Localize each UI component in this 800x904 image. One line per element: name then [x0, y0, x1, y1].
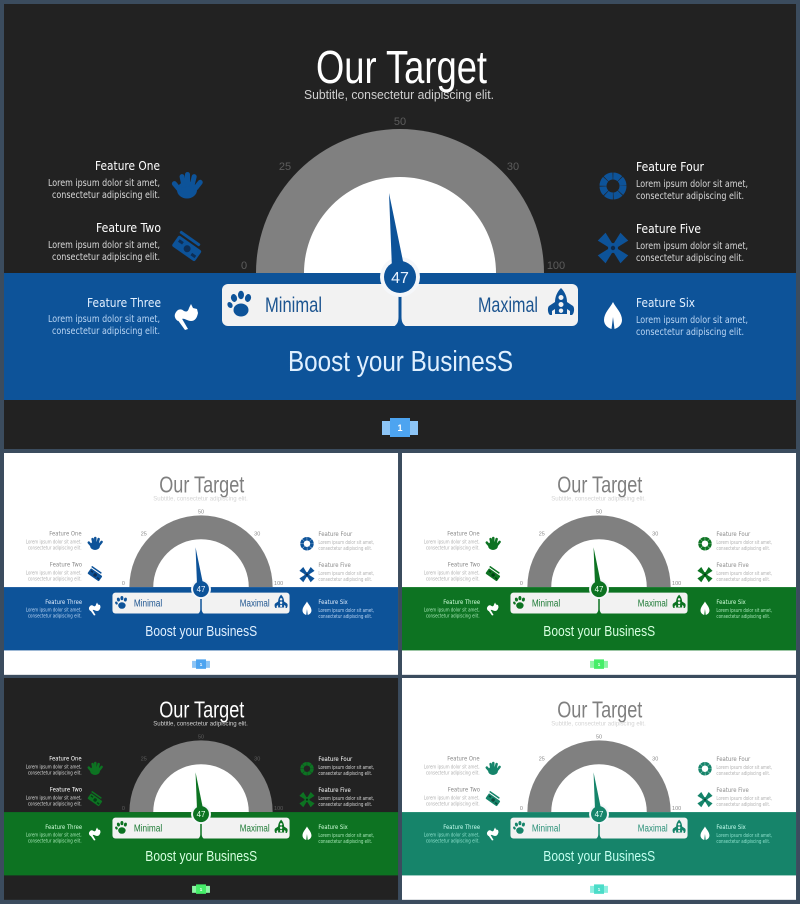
feature two: [48, 221, 161, 263]
feature three: Feature Three: [443, 599, 480, 606]
feature six: consectetur adipiscing elit.: [716, 614, 770, 620]
feature five: consectetur adipiscing elit.: [318, 802, 372, 808]
needle and value dial: [191, 772, 211, 824]
feature four: consectetur adipiscing elit.: [716, 546, 770, 552]
band: [4, 273, 796, 400]
icon: ring: [302, 539, 312, 549]
feature three: consectetur adipiscing elit.: [28, 614, 82, 620]
feature four: consectetur adipiscing elit.: [318, 546, 372, 552]
feature three: Feature Three: [443, 824, 480, 831]
subtitle: Subtitle, consectetur adipiscing elit.: [551, 495, 646, 502]
feature five: Lorem ipsum dolor sit amet,: [636, 241, 748, 252]
feature six: [716, 824, 772, 845]
feature four: Feature Four: [636, 160, 704, 174]
feature one: consectetur adipiscing elit.: [426, 546, 480, 552]
gauge: 30: [254, 757, 260, 763]
feature two: consectetur adipiscing elit.: [28, 577, 82, 583]
icon: windmill: [694, 563, 716, 586]
feature one: Lorem ipsum dolor sit amet,: [424, 765, 480, 771]
feature three: Lorem ipsum dolor sit amet,: [424, 833, 480, 839]
feature three: Feature Three: [45, 824, 82, 831]
feature one: Feature One: [447, 531, 480, 538]
needle and value dial: 47: [197, 585, 206, 594]
feature six: Lorem ipsum dolor sit amet,: [636, 315, 748, 326]
feature four: Lorem ipsum dolor sit amet,: [318, 765, 374, 771]
gauge: [241, 116, 565, 273]
minimal maximal box: [510, 593, 688, 614]
feature six: Lorem ipsum dolor sit amet,: [716, 608, 772, 614]
subtitle: Subtitle, consectetur adipiscing elit.: [153, 720, 248, 727]
feature five: Feature Five: [636, 222, 701, 236]
feature three: [26, 599, 82, 620]
minimal maximal box: Minimal: [134, 599, 162, 610]
feature four: Lorem ipsum dolor sit amet,: [318, 540, 374, 546]
icon: ring: [700, 764, 710, 774]
feature six: [716, 599, 772, 620]
feature four: Lorem ipsum dolor sit amet,: [716, 765, 772, 771]
feature six: consectetur adipiscing elit.: [636, 327, 744, 338]
subtitle: Subtitle, consectetur adipiscing elit.: [304, 87, 494, 102]
feature three: Lorem ipsum dolor sit amet,: [26, 833, 82, 839]
icon: flag: [89, 603, 101, 616]
panel: small light blue slide: [4, 453, 398, 675]
needle and value dial: [589, 547, 609, 599]
pager: 1: [598, 887, 601, 892]
feature one: consectetur adipiscing elit.: [52, 190, 160, 201]
title: Our Target: [159, 471, 245, 497]
pager: 1: [200, 887, 203, 892]
feature six: Lorem ipsum dolor sit amet,: [318, 608, 374, 614]
gauge: 30: [652, 757, 658, 763]
feature two: Feature Two: [448, 562, 480, 569]
panel: small dark green slide: [4, 678, 398, 900]
gauge: 50: [198, 509, 204, 515]
feature one: Feature One: [95, 159, 160, 173]
needle and value dial: 47: [197, 810, 206, 819]
title: Our Target: [316, 41, 487, 93]
gauge: 30: [652, 532, 658, 538]
feature two: Lorem ipsum dolor sit amet,: [48, 240, 160, 251]
panel: small light teal slide: [402, 678, 796, 900]
gauge: 100: [274, 806, 283, 812]
icon: hand: [171, 172, 204, 198]
pager: [590, 884, 608, 894]
icon: flag: [487, 828, 499, 841]
gauge: 25: [279, 161, 291, 173]
feature five: [716, 562, 772, 583]
feature six: Feature Six: [318, 824, 348, 831]
feature four: Lorem ipsum dolor sit amet,: [636, 179, 748, 190]
feature one: Feature One: [49, 756, 82, 763]
feature two: Lorem ipsum dolor sit amet,: [424, 796, 480, 802]
icon: hand: [485, 537, 501, 550]
feature five: Lorem ipsum dolor sit amet,: [716, 571, 772, 577]
feature two: consectetur adipiscing elit.: [52, 252, 160, 263]
feature six: Feature Six: [636, 296, 695, 310]
icon: ring: [302, 764, 312, 774]
feature six: consectetur adipiscing elit.: [716, 839, 770, 845]
feature six: [318, 599, 374, 620]
minimal maximal box: Maximal: [478, 294, 538, 317]
icon: leaf: [700, 602, 709, 615]
pager: [382, 418, 418, 437]
feature one: [424, 531, 480, 552]
icon: hand: [87, 762, 103, 775]
feature four: [716, 756, 772, 777]
feature three: Lorem ipsum dolor sit amet,: [48, 314, 160, 325]
icon: flag: [175, 304, 198, 330]
gauge: 25: [539, 757, 545, 763]
pager: 1: [397, 423, 403, 433]
feature three: consectetur adipiscing elit.: [426, 614, 480, 620]
feature four: consectetur adipiscing elit.: [716, 771, 770, 777]
panel: large dark blue slide: [4, 4, 796, 449]
feature two: [424, 562, 480, 583]
icon: hand: [87, 537, 103, 550]
gauge: 30: [254, 532, 260, 538]
gauge: 25: [539, 532, 545, 538]
feature one: Feature One: [447, 756, 480, 763]
minimal maximal box: Maximal: [638, 599, 668, 610]
icon: money: [485, 791, 502, 806]
feature five: Feature Five: [716, 562, 749, 569]
pager: 1: [200, 662, 203, 667]
gauge: 50: [596, 509, 602, 515]
pager: [192, 884, 210, 894]
feature six: consectetur adipiscing elit.: [318, 614, 372, 620]
feature two: Feature Two: [448, 787, 480, 794]
feature four: [716, 531, 772, 552]
feature one: [26, 531, 82, 552]
icon: flag: [89, 828, 101, 841]
band: [402, 812, 796, 875]
subtitle: Subtitle, consectetur adipiscing elit.: [153, 495, 248, 502]
gauge: [520, 734, 681, 812]
feature one: Lorem ipsum dolor sit amet,: [26, 765, 82, 771]
gauge: 0: [520, 806, 523, 812]
gauge: [520, 509, 681, 587]
needle and value dial: [380, 193, 420, 297]
tagline: Boost your BusinesS: [543, 849, 655, 865]
minimal maximal box: Maximal: [638, 824, 668, 835]
icon: leaf: [700, 827, 709, 840]
minimal maximal box: Maximal: [240, 824, 270, 835]
panel: small light green slide: [402, 453, 796, 675]
feature three: [424, 824, 480, 845]
feature three: Lorem ipsum dolor sit amet,: [424, 608, 480, 614]
feature three: [26, 824, 82, 845]
feature two: consectetur adipiscing elit.: [426, 577, 480, 583]
needle and value dial: 47: [391, 270, 409, 287]
feature two: Lorem ipsum dolor sit amet,: [26, 571, 82, 577]
tagline: Boost your BusinesS: [145, 624, 257, 640]
feature five: Lorem ipsum dolor sit amet,: [318, 571, 374, 577]
feature three: Feature Three: [45, 599, 82, 606]
feature one: consectetur adipiscing elit.: [28, 771, 82, 777]
minimal maximal box: Minimal: [532, 824, 560, 835]
feature two: consectetur adipiscing elit.: [426, 802, 480, 808]
feature two: Lorem ipsum dolor sit amet,: [26, 796, 82, 802]
feature five: [318, 787, 374, 808]
feature one: Lorem ipsum dolor sit amet,: [424, 540, 480, 546]
needle and value dial: [589, 772, 609, 824]
icon: hand: [485, 762, 501, 775]
icon: money: [171, 230, 205, 262]
gauge: 0: [241, 260, 247, 272]
feature six: Feature Six: [716, 824, 746, 831]
tagline: Boost your BusinesS: [145, 849, 257, 865]
needle and value dial: [191, 547, 211, 599]
feature two: consectetur adipiscing elit.: [28, 802, 82, 808]
gauge: 50: [198, 734, 204, 740]
feature two: Lorem ipsum dolor sit amet,: [424, 571, 480, 577]
feature five: [636, 222, 748, 264]
feature two: [424, 787, 480, 808]
feature six: Lorem ipsum dolor sit amet,: [318, 833, 374, 839]
feature two: Feature Two: [50, 787, 82, 794]
gauge: [122, 734, 283, 812]
feature six: [636, 296, 748, 338]
needle and value dial: 47: [595, 585, 604, 594]
icon: ring: [603, 176, 623, 196]
icon: flag: [487, 603, 499, 616]
feature three: Lorem ipsum dolor sit amet,: [26, 608, 82, 614]
pager: 1: [598, 662, 601, 667]
band: [4, 587, 398, 650]
feature five: consectetur adipiscing elit.: [318, 577, 372, 583]
gauge: 25: [141, 757, 147, 763]
feature six: Feature Six: [716, 599, 746, 606]
feature five: [716, 787, 772, 808]
feature two: Feature Two: [96, 221, 161, 235]
feature one: Feature One: [49, 531, 82, 538]
gauge: 50: [394, 116, 406, 128]
title: Our Target: [557, 696, 643, 722]
gauge: 50: [596, 734, 602, 740]
gauge: 25: [141, 532, 147, 538]
icon: windmill: [296, 788, 318, 811]
band: [402, 587, 796, 650]
feature four: [636, 160, 748, 202]
minimal maximal box: Minimal: [532, 599, 560, 610]
feature six: consectetur adipiscing elit.: [318, 839, 372, 845]
gauge: [122, 509, 283, 587]
minimal maximal box: [112, 593, 290, 614]
feature one: consectetur adipiscing elit.: [28, 546, 82, 552]
feature four: [318, 756, 374, 777]
icon: money: [87, 791, 104, 806]
feature four: Feature Four: [716, 531, 751, 538]
icon: windmill: [296, 563, 318, 586]
feature five: Feature Five: [716, 787, 749, 794]
gauge: 100: [672, 581, 681, 587]
gauge: 100: [547, 260, 565, 272]
feature six: Feature Six: [318, 599, 348, 606]
feature four: consectetur adipiscing elit.: [636, 191, 744, 202]
minimal maximal box: [222, 284, 578, 327]
icon: money: [485, 566, 502, 581]
minimal maximal box: Minimal: [265, 294, 322, 317]
icon: leaf: [604, 302, 622, 329]
title: Our Target: [159, 696, 245, 722]
pager: [192, 659, 210, 669]
feature five: [318, 562, 374, 583]
feature five: Lorem ipsum dolor sit amet,: [318, 796, 374, 802]
subtitle: Subtitle, consectetur adipiscing elit.: [551, 720, 646, 727]
feature one: [48, 159, 160, 201]
feature three: consectetur adipiscing elit.: [52, 326, 160, 337]
feature five: consectetur adipiscing elit.: [716, 802, 770, 808]
feature three: [424, 599, 480, 620]
gauge: 0: [520, 581, 523, 587]
feature one: consectetur adipiscing elit.: [426, 771, 480, 777]
gauge: 30: [507, 161, 519, 173]
feature five: Feature Five: [318, 787, 351, 794]
feature two: [26, 787, 82, 808]
feature five: consectetur adipiscing elit.: [636, 253, 744, 264]
feature one: [26, 756, 82, 777]
feature four: [318, 531, 374, 552]
feature three: consectetur adipiscing elit.: [426, 839, 480, 845]
feature four: consectetur adipiscing elit.: [318, 771, 372, 777]
feature one: Lorem ipsum dolor sit amet,: [48, 178, 160, 189]
feature four: Feature Four: [318, 531, 353, 538]
feature five: Feature Five: [318, 562, 351, 569]
feature six: [318, 824, 374, 845]
title: Our Target: [557, 471, 643, 497]
gauge: 0: [122, 581, 125, 587]
feature two: Feature Two: [50, 562, 82, 569]
gauge: 0: [122, 806, 125, 812]
feature three: [48, 296, 161, 337]
minimal maximal box: [112, 818, 290, 839]
icon: leaf: [302, 602, 311, 615]
icon: windmill: [590, 225, 636, 271]
minimal maximal box: Minimal: [134, 824, 162, 835]
feature five: Lorem ipsum dolor sit amet,: [716, 796, 772, 802]
feature three: Feature Three: [87, 296, 161, 310]
feature six: Lorem ipsum dolor sit amet,: [716, 833, 772, 839]
icon: leaf: [302, 827, 311, 840]
feature four: Lorem ipsum dolor sit amet,: [716, 540, 772, 546]
feature one: Lorem ipsum dolor sit amet,: [26, 540, 82, 546]
feature five: consectetur adipiscing elit.: [716, 577, 770, 583]
icon: ring: [700, 539, 710, 549]
minimal maximal box: [510, 818, 688, 839]
pager: [590, 659, 608, 669]
feature four: Feature Four: [716, 756, 751, 763]
feature four: Feature Four: [318, 756, 353, 763]
needle and value dial: 47: [595, 810, 604, 819]
icon: windmill: [694, 788, 716, 811]
band: [4, 812, 398, 875]
feature three: consectetur adipiscing elit.: [28, 839, 82, 845]
minimal maximal box: Maximal: [240, 599, 270, 610]
tagline: Boost your BusinesS: [543, 624, 655, 640]
icon: money: [87, 566, 104, 581]
feature one: [424, 756, 480, 777]
gauge: 100: [672, 806, 681, 812]
gauge: 100: [274, 581, 283, 587]
feature two: [26, 562, 82, 583]
tagline: Boost your BusinesS: [288, 346, 513, 378]
